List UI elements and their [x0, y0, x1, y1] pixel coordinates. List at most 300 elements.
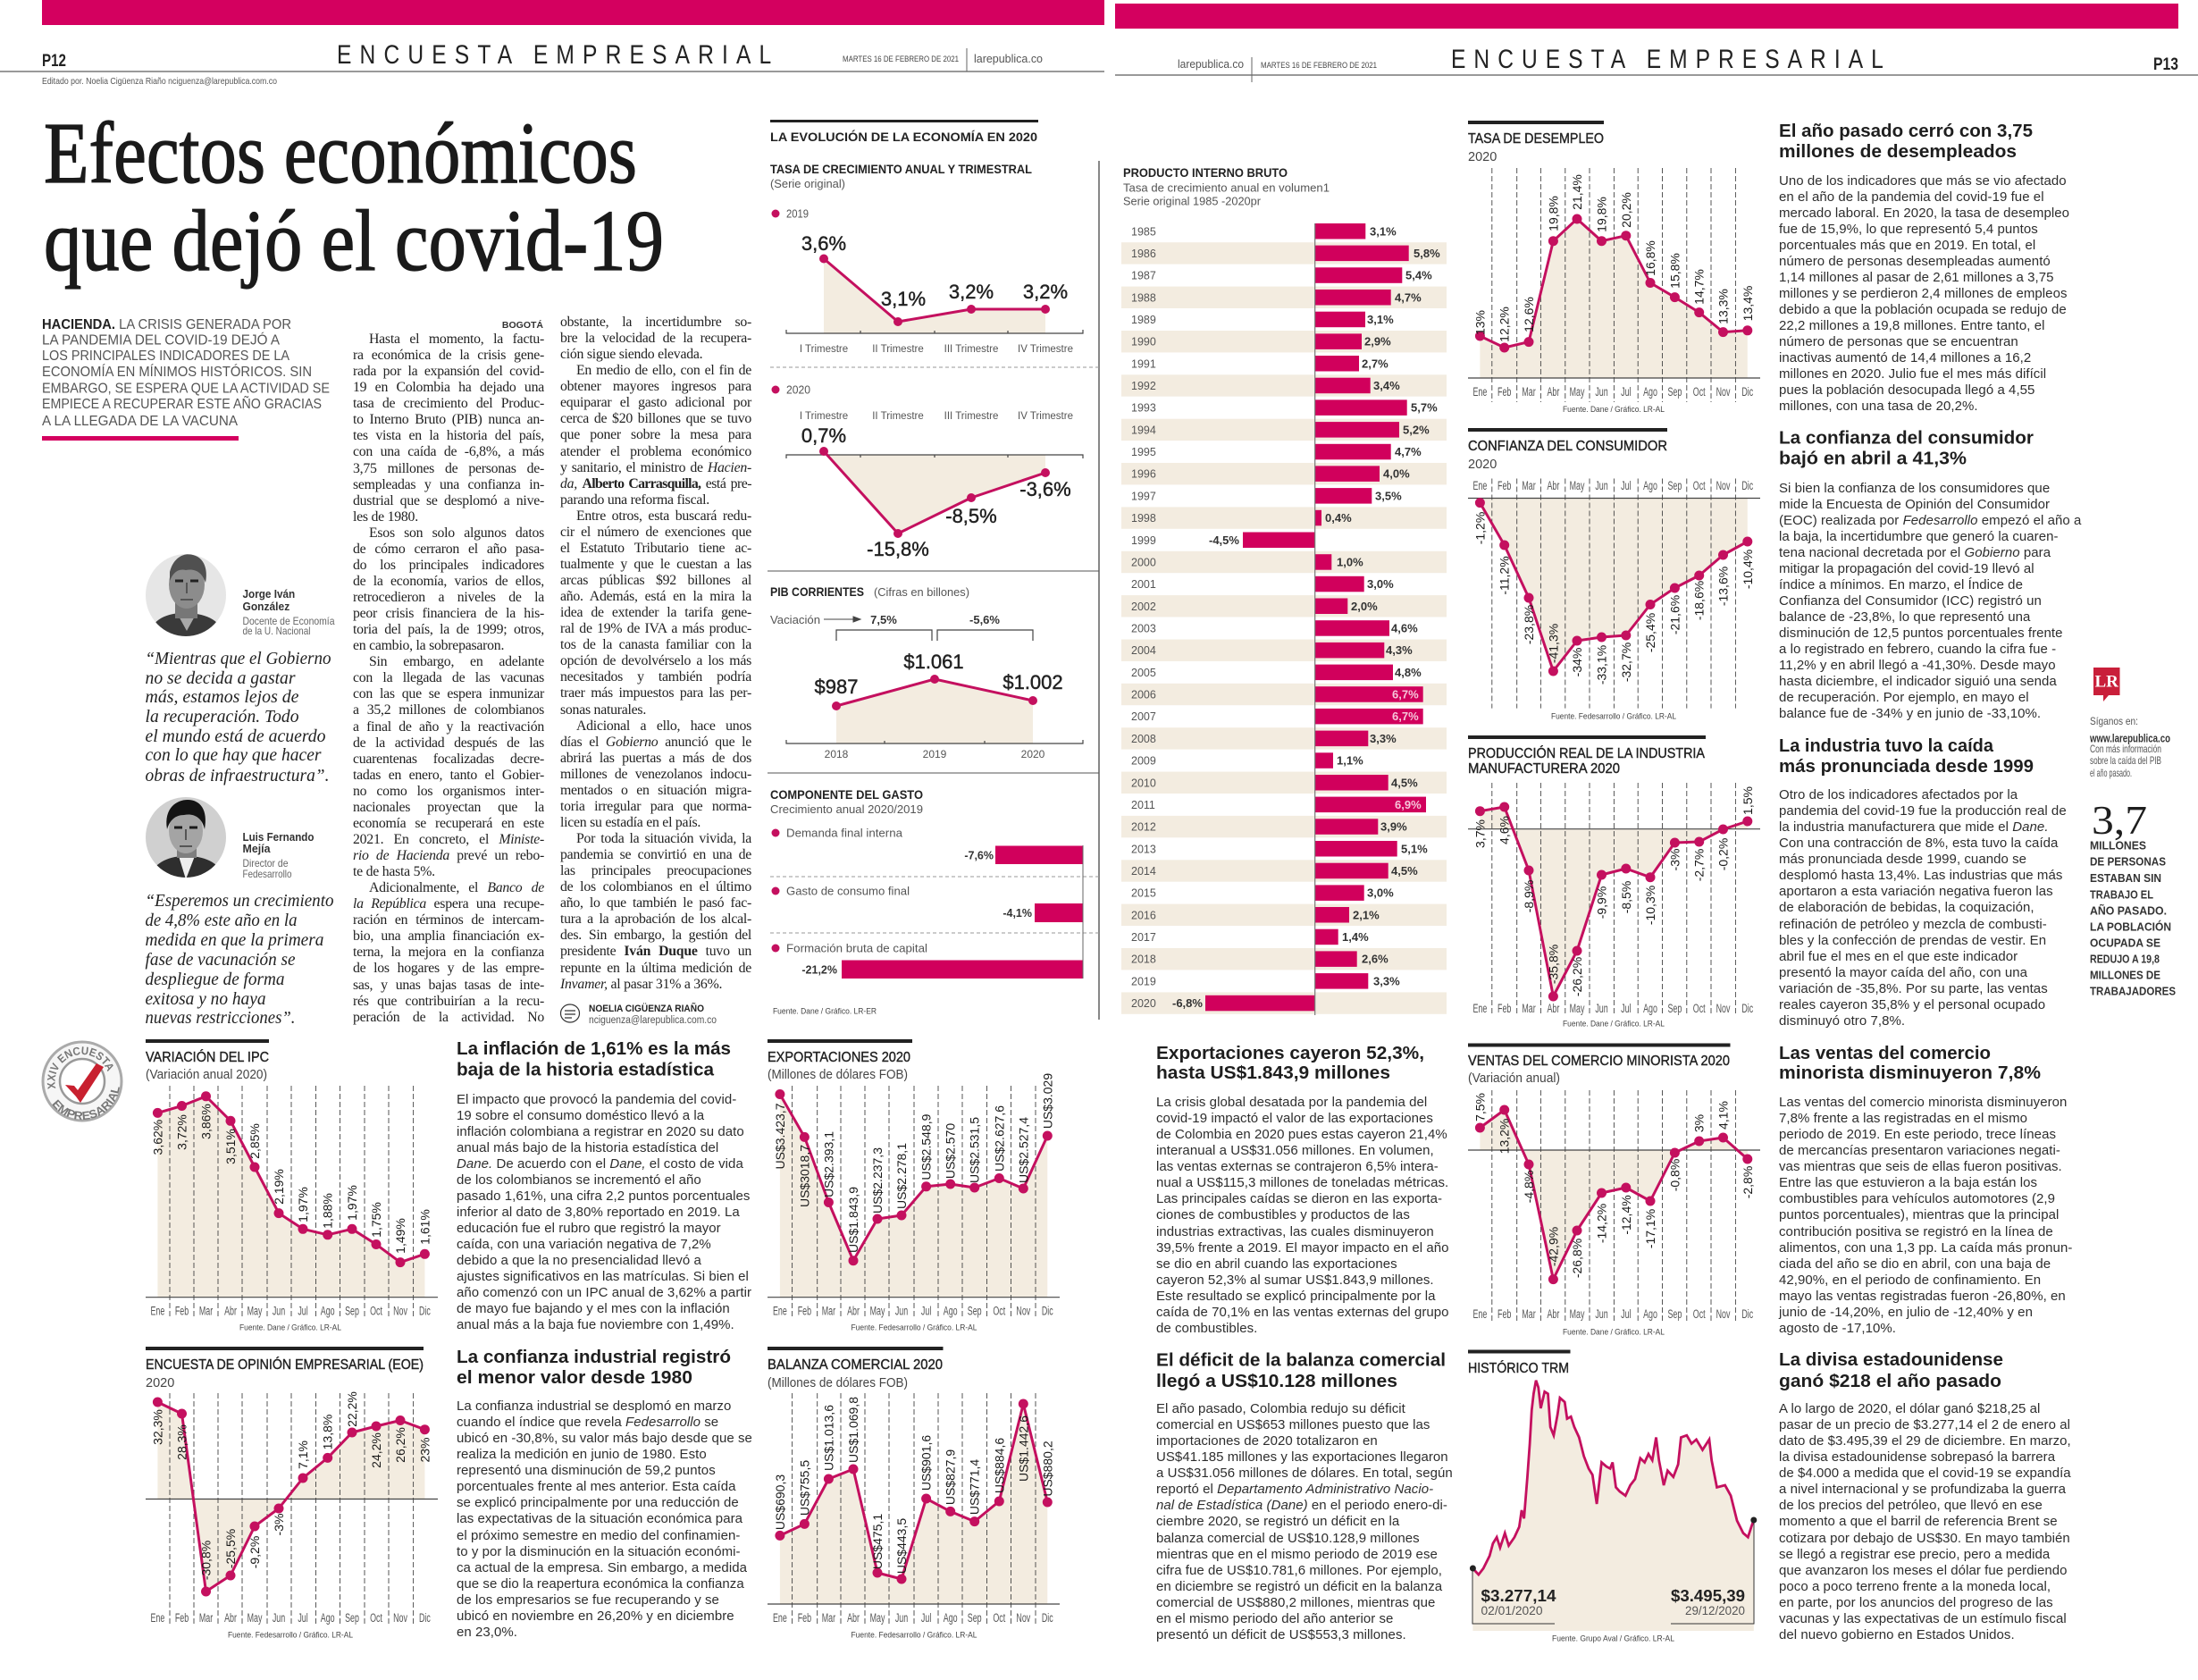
year labels: 1987 [1131, 270, 1156, 282]
month labels: Dic [1042, 1612, 1053, 1625]
article column 1: dustrial que se desplomó a nive- [353, 493, 544, 508]
text block: divisa: se llegó a registrar ese precio, pero a medida [1779, 1547, 2050, 1562]
month labels: Jun [273, 1306, 285, 1318]
article column 2: cerca de $20 billones que se tuvo [560, 411, 751, 426]
heading: exportaciones [768, 1039, 912, 1082]
headline: ventas minoristas: minorista disminuyeron 7,8% [1779, 1063, 2041, 1083]
month labels: Oct [1693, 386, 1706, 399]
text block: desempleados: porcentuales más que en 2019. En total, el [1779, 238, 2035, 253]
value labels: 3,62% [150, 1120, 164, 1155]
value labels: 2,85% [247, 1123, 262, 1159]
article column 1: rés que contribuirían a la recu- [353, 994, 544, 1009]
line series [780, 1094, 1047, 1261]
month labels: Dic [1741, 1308, 1753, 1322]
article column 1: to Interno Bruto (PIB) nunca an- [353, 412, 544, 427]
month labels: Nov [1716, 1308, 1731, 1322]
text block: divisa: la divisa estadounidense sobrepasó la barrera [1779, 1449, 2055, 1465]
month labels: Ene [150, 1612, 164, 1625]
article column 1: con una caída de -6,8%, a más [353, 444, 544, 459]
text block: confianza industrial: realiza la medición en junio de 1980. Esto [457, 1447, 707, 1462]
chart: componente del gasto: -4,1% [1003, 907, 1032, 920]
value labels: US$771,4 [968, 1459, 982, 1515]
heading: confianza [1468, 428, 1667, 472]
value labels: US$755,5 [797, 1460, 811, 1516]
header: page 13: larepublica.co [1178, 57, 1244, 71]
article column 1: de cómo cerraron el año pasa- [353, 542, 544, 557]
article column 2: ción sigue siendo elevada. [560, 347, 702, 362]
heading: confianza: 2020 [1468, 458, 1497, 472]
heading: balanza [768, 1347, 944, 1390]
article column 2: días el Gobierno anunció que le [560, 735, 751, 750]
text block: inflación: anual más a la baja fue noviembre con 1,49%. [457, 1317, 734, 1332]
article column 2: opción de devolvérselo a los más [560, 653, 751, 668]
text block: desempleados: millones y se perdieron 2,4 millones de empleos [1779, 286, 2068, 301]
text block: divisa [1779, 1401, 2071, 1642]
lead paragraph: HACIENDA. LA CRISIS GENERADA POR [42, 317, 291, 332]
text block: desempleados: millones, con una tasa de 20,2%. [1779, 399, 1978, 414]
byline: nciguenza@larepublica.com.co [589, 1015, 717, 1026]
month labels: Oct [370, 1612, 383, 1625]
value labels: -23,8% [1522, 605, 1536, 644]
year labels [1131, 225, 1156, 1010]
value labels: 4,0% [1383, 467, 1410, 481]
value labels: -8,9% [1522, 880, 1536, 912]
text block: ventas minoristas: combustibles para vehículos automotores (2,9 [1779, 1191, 2055, 1206]
article column 2: bre la velocidad de la recupera- [560, 331, 751, 346]
quote: Mejía: exitosa y no haya [145, 989, 266, 1009]
value labels: 12,2% [1497, 307, 1512, 342]
value labels: 1,4% [1342, 930, 1369, 944]
value labels: -25,5% [223, 1529, 238, 1568]
headline: industria: más pronunciada desde 1999 [1779, 757, 2034, 777]
year labels: 1988 [1131, 291, 1156, 304]
article column 2: las principales preocupaciones [560, 863, 751, 878]
quote: González: “Mientras que el Gobierno [145, 649, 331, 668]
month labels [150, 1612, 431, 1625]
article column 1: terna, la mejora en la confianza [353, 945, 544, 960]
heading: EOE: 2020 [146, 1376, 174, 1390]
article column 1: 2021. En concreto, el Ministe- [353, 832, 544, 847]
year labels: 1998 [1131, 512, 1156, 525]
heading: desempleo [1468, 121, 1604, 164]
value labels: 15,8% [1667, 253, 1682, 289]
text block: ventas minoristas: contribución positiva se registró en la línea de [1779, 1224, 2053, 1239]
article column 1: 19 en Colombia ha dejado una [353, 380, 544, 395]
month labels: Sep [345, 1306, 359, 1318]
value labels: 4,8% [1395, 666, 1422, 679]
value labels: 4,1% [1716, 1101, 1730, 1130]
text block: inflación: Dane. De acuerdo con el Dane, el costo de vida [457, 1156, 743, 1172]
chart: componente del gasto: -21,2% [801, 963, 837, 976]
month labels: Mar [199, 1306, 213, 1318]
chart: PIB corrientes: -5,6% [969, 613, 1000, 626]
header: page 12: Editado por. Noelia Cigüenza Riaño nciguenza@larepublica.com.co [42, 76, 277, 87]
value labels: US$2.531,5 [968, 1117, 982, 1183]
value labels: 5,4% [1405, 269, 1432, 282]
chart: PIB corrientes: 7,5% [870, 613, 897, 626]
year labels: 1989 [1131, 314, 1156, 326]
text block: divisa: vacunas y las expectativas de un estímulo fiscal [1779, 1611, 2067, 1626]
text block: consumidor: balance fue de -34% y en junio de -33,10%. [1779, 706, 2041, 721]
text block: confianza industrial: cuando el índice que revela Fedesarrollo se [457, 1415, 718, 1430]
value labels: 4,6% [1497, 816, 1512, 844]
quote: Mejía: de 4,8% este año en la [145, 911, 297, 930]
line series [157, 1402, 424, 1592]
year labels: 2017 [1131, 931, 1156, 944]
month labels: Ago [321, 1306, 335, 1318]
article column 1: tasa de crecimiento del Produc- [353, 396, 544, 411]
article column 2: ral de 19% de IVA a más produc- [560, 621, 751, 636]
article column 1: ración en términos de intercam- [353, 912, 544, 928]
value labels: 20,2% [1619, 192, 1633, 228]
value labels: -2,7% [1692, 849, 1707, 881]
text block: inflación: de los colombianos se incrementó el año [457, 1172, 701, 1188]
month labels: Feb [175, 1306, 189, 1318]
sidebar: big number: OCUPADA SE [2090, 937, 2160, 949]
text block: exportaciones: covid-19 impactó el valor de las exportaciones [1156, 1111, 1433, 1126]
text block: exportaciones: La crisis global desatada por la pandemia del [1156, 1095, 1427, 1110]
chart: crecimiento 2020: -3,6% [1019, 478, 1071, 500]
value labels: -26,2% [1570, 957, 1584, 996]
quote: González: la recuperación. Todo [145, 707, 298, 727]
heading: ventas [1468, 1044, 1730, 1086]
article column 1: 3,75 millones de personas de- [353, 461, 544, 475]
value labels: US$3018,7 [797, 1145, 811, 1207]
chart: exportaciones 2020 [768, 1039, 1060, 1333]
month labels: Mar [1522, 386, 1536, 399]
year labels: 2002 [1131, 601, 1156, 613]
text block: inflación: anual más bajo de la historia estadística del [457, 1140, 718, 1155]
month labels: Dic [1741, 1003, 1753, 1016]
article column 1: de la actividad después de las [353, 735, 544, 751]
seal: XXIV Encuesta Empresarial [41, 1040, 123, 1122]
chart: crecimiento 2020: 2020 [786, 382, 810, 397]
month labels: Abr [847, 1612, 860, 1625]
month labels: May [870, 1306, 885, 1318]
icon: LR logo [2093, 668, 2119, 701]
byline [561, 1003, 717, 1026]
article column 2: que poner sobre la mesa para [560, 427, 751, 442]
text block: consumidor: (EOC) realizada por Fedesarrollo empezó el año a [1779, 513, 2081, 528]
lead paragraph: A LA LLEGADA DE LA VACUNA [42, 414, 238, 429]
year labels: 2011 [1131, 799, 1155, 811]
month labels [150, 1306, 431, 1318]
chart: crecimiento 2020: -8,5% [945, 505, 997, 527]
heading: producción [1468, 735, 1706, 777]
value labels: 3,4% [1373, 379, 1400, 392]
chart: crecimiento 2019: 3,6% [801, 232, 846, 255]
value labels: 1,5% [1741, 786, 1755, 815]
month labels: Feb [798, 1612, 811, 1625]
sidebar: big number [2090, 797, 2176, 997]
year labels: 2005 [1131, 667, 1156, 679]
value labels: -4,8% [1522, 1171, 1536, 1203]
headline: divisa [1779, 1350, 2003, 1391]
text block: déficit: en diciembre se registró un déficit en la balanza [1156, 1579, 1442, 1594]
header: page 13: P13 [2153, 55, 2178, 74]
article column 1: de los hogares y de las empre- [353, 961, 544, 976]
value labels [1172, 224, 1440, 1010]
month labels: Feb [1497, 480, 1511, 493]
month labels: Jul [1621, 1308, 1631, 1322]
chart: PIB corrientes [768, 584, 1099, 773]
value labels [150, 1391, 432, 1580]
heading: producto interno bruto: Tasa de crecimiento anual en volumen1 [1123, 181, 1330, 195]
text block: inflación: debido a que la no presencialidad llevó a [457, 1253, 701, 1268]
text block: industria: más pronunciada desde 1999, cuando se [1779, 852, 2026, 867]
value labels: 16,8% [1643, 240, 1657, 276]
heading: desempleo: TASA DE DESEMPLEO [1468, 131, 1604, 147]
chart: crecimiento 2019: 3,2% [949, 281, 994, 303]
text block: divisa: de los precios del petróleo, que llevó en ese [1779, 1498, 2043, 1513]
article column 1: no como los organismos inter- [353, 784, 544, 799]
year labels: 1993 [1131, 402, 1156, 415]
value labels: -41,3% [1546, 624, 1560, 663]
article column 2: pandemia se convirtió en una de [560, 847, 751, 862]
value labels [150, 1104, 432, 1254]
text block: industria: desplomó hasta 13,4%. Las industrias que más [1779, 868, 2062, 883]
heading: producto interno bruto [1123, 165, 1330, 207]
month labels: Ago [1643, 386, 1657, 399]
article column 1: con la llegada de las vacunas [353, 670, 544, 685]
month labels: Ene [1472, 480, 1487, 493]
value labels: 1,0% [1337, 556, 1363, 568]
article column 1: rada por la expansión del covid- [353, 364, 544, 379]
value labels: US$3.423,7 [773, 1103, 787, 1169]
name: Luis Fernando Mejía: Director de [243, 857, 289, 869]
headline: inflación [457, 1039, 731, 1079]
article column 1: te de hasta 5%. [353, 864, 435, 879]
article column 1: toria del país, la de 1999; otros, [353, 622, 544, 637]
text block: industria: presentó la mayor caída del año, con una [1779, 965, 2027, 980]
headline: consumidor: bajó en abril a 41,3% [1779, 449, 1967, 469]
article column 2: Invamer, al pasar 31% a 36%. [560, 977, 722, 992]
month labels: Jun [1595, 480, 1608, 493]
month labels: Ene [1472, 1003, 1487, 1016]
headline: confianza industrial: el menor valor desde 1980 [457, 1368, 692, 1388]
value labels: 26,2% [393, 1427, 407, 1463]
value labels: 13,4% [1741, 286, 1755, 321]
value labels: -34% [1570, 648, 1584, 676]
heading: EOE: ENCUESTA DE OPINIÓN EMPRESARIAL (EOE) [146, 1356, 424, 1373]
article column 2: arcas públicas $92 billones al [560, 573, 751, 588]
year labels: 1986 [1131, 248, 1156, 260]
month labels: Ene [773, 1306, 787, 1318]
text block: desempleados: 22,2 millones a 19,8 millones. Entre tanto, el [1779, 318, 2044, 333]
value labels: -33,1% [1594, 645, 1608, 685]
month labels: Oct [1693, 1003, 1706, 1016]
text block: desempleados: número de personas que se encuentran [1779, 334, 2018, 349]
year labels: 2010 [1131, 777, 1156, 789]
header: page 12: P12 [42, 52, 66, 71]
headline: divisa: ganó $218 el año pasado [1779, 1372, 2001, 1391]
chart: exportaciones 2020: Fuente. Fedesarrollo / Gráfico. LR-AL [851, 1323, 977, 1333]
article column 1: les de 1980. [353, 509, 418, 525]
month labels [773, 1306, 1053, 1318]
heading: evolución: LA EVOLUCIÓN DE LA ECONOMÍA EN 2020 [770, 129, 1037, 144]
article column 2: atender el problema económico [560, 443, 751, 459]
text block: consumidor: hasta diciembre, el indicador siguió una senda [1779, 674, 2057, 689]
text block: exportaciones: 39,5% frente a 2019. El mayor impacto en el año [1156, 1240, 1449, 1256]
value labels: 1,97% [345, 1185, 359, 1221]
article column 1: ra económica de la crisis gene- [353, 348, 544, 363]
value labels: 5,1% [1401, 842, 1428, 855]
year labels: 2013 [1131, 843, 1156, 855]
year labels: 2016 [1131, 909, 1156, 921]
quote: González: el mundo está de acuerdo [145, 727, 325, 746]
text block: industria: reales cayeron 35,8% y el personal ocupado [1779, 997, 2045, 1012]
subheading: tasa de crecimiento: TASA DE CRECIMIENTO ANUAL Y TRIMESTRAL [770, 163, 1032, 176]
quote: González: más, estamos lejos de [145, 687, 299, 707]
text block: exportaciones: nual a US$115,3 millones de toneladas métricas. [1156, 1175, 1448, 1190]
chart: componente del gasto: Fuente. Dane / Gráfico. LR-ER [773, 1006, 877, 1017]
chart: componente del gasto: Gasto de consumo final [786, 885, 910, 897]
year labels: 2019 [1131, 975, 1156, 987]
month labels [1472, 1003, 1753, 1016]
chart: tasa de desempleo: Fuente. Dane / Gráfico. LR-AL [1563, 405, 1665, 415]
year labels: 2015 [1131, 887, 1156, 900]
value labels: 1,49% [393, 1218, 407, 1254]
portrait: Luis Fernando Mejía [146, 797, 226, 878]
month labels: Oct [993, 1612, 1006, 1625]
text block: industria: disminuyó otro 7,8%. [1779, 1013, 1905, 1029]
heading: exportaciones: (Millones de dólares FOB) [768, 1068, 908, 1082]
value labels: -30,8% [198, 1541, 213, 1580]
sidebar: síganos: sobre la caída del PIB [2090, 754, 2161, 767]
year labels: 2012 [1131, 821, 1156, 834]
heading: ventas: (Variación anual) [1468, 1071, 1560, 1086]
text block: déficit: ciembre 2020, se registró un déficit en la [1156, 1514, 1399, 1529]
article column 1: sempleadas y una confianza in- [353, 477, 544, 492]
text block: déficit: El año pasado, Colombia redujo su déficit [1156, 1401, 1405, 1416]
row stripes [1121, 242, 1447, 1014]
headline: confianza industrial [457, 1348, 731, 1388]
text block: confianza industrial: ubicó en noviembre en 26,20% y en diciembre [457, 1609, 734, 1624]
lead paragraph: ECONOMÍA EN MÍNIMOS HISTÓRICOS. SIN [42, 363, 312, 380]
chart: variación del IPC [146, 1039, 438, 1333]
month labels: Mar [822, 1612, 835, 1625]
value labels: 3,0% [1367, 886, 1394, 900]
value labels: 4,5% [1391, 776, 1418, 789]
text block: desempleados: 1,14 millones al pasar de 2,61 millones a 3,75 [1779, 270, 2053, 285]
value labels: -0,8% [1667, 1159, 1682, 1191]
article column 1: de la economía, varios de ellos, [353, 574, 544, 589]
chart: crecimiento 2019: IV Trimestre [1018, 344, 1073, 355]
text block: consumidor: índice a mínimos. En marzo, el Índice de [1779, 577, 2023, 592]
heading: balanza: BALANZA COMERCIAL 2020 [768, 1357, 943, 1373]
chart: PIB corrientes: $1.002 [1003, 671, 1063, 693]
text block: déficit: cifra fue de US$10.781,6 millones. Por ejemplo, [1156, 1563, 1442, 1578]
sidebar: big number: AÑO PASADO. [2090, 904, 2167, 917]
value labels: 22,2% [345, 1391, 359, 1427]
value labels: 1,75% [369, 1202, 383, 1238]
text block: consumidor: Confianza del Consumidor (ICC) registró un [1779, 593, 2042, 609]
heading: variación del IPC [146, 1039, 269, 1082]
article column 1: con las que se espera inmunizar [353, 686, 544, 701]
text block: inflación: pasado 1,61%, una cifra 2,2 puntos porcentuales [457, 1189, 750, 1204]
sidebar: big number: REDUJO A 19,8 [2090, 953, 2160, 965]
text block: ventas minoristas: vas mientras que seis de ellas fueron positivas. [1779, 1159, 2062, 1174]
month labels: Abr [224, 1306, 237, 1318]
header: page 12: ENCUESTA EMPRESARIAL [337, 39, 771, 70]
text block: consumidor: tena nacional decretada por el Gobierno para [1779, 545, 2051, 560]
chart: variación del IPC: Fuente. Dane / Gráfico. LR-AL [239, 1323, 341, 1333]
month labels: Jun [1595, 1003, 1608, 1016]
last value: $3.495,39 [1671, 1587, 1745, 1605]
value labels: -11,2% [1497, 556, 1512, 595]
heading: variación del IPC: (Variación anual 2020) [146, 1068, 267, 1082]
month labels [1472, 480, 1753, 493]
article column 1: tes vista en la historia del país, [353, 428, 544, 443]
month labels: Dic [1042, 1306, 1053, 1318]
text block: inflación: caída, con una variación negativa de 7,2% [457, 1237, 711, 1252]
text block: inflación: 19 sobre el consumo doméstico llevó a la [457, 1108, 704, 1123]
text block: desempleados: en el año de la pandemia del covid-19 fue el [1779, 189, 2044, 205]
byline: NOELIA CIGÜENZA RIAÑO [589, 1003, 704, 1014]
chart: PIB corrientes: $1.061 [903, 651, 964, 673]
article column 2: da, Alberto Carrasquilla, está pre- [560, 476, 751, 491]
heading: variación del IPC: VARIACIÓN DEL IPC [146, 1048, 269, 1065]
value labels: -17,1% [1643, 1209, 1657, 1248]
text block: confianza industrial: en 23,0%. [457, 1625, 517, 1640]
title: Efectos económicos [44, 105, 637, 201]
text block: divisa: en parte, por los anuncios del progreso de las [1779, 1595, 2053, 1610]
month labels: Nov [1016, 1612, 1030, 1625]
value labels: US$2.393,1 [821, 1131, 835, 1197]
heading: producto interno bruto: Serie original 1985 -2020pr [1123, 195, 1262, 207]
value labels: -42,9% [1546, 1227, 1560, 1266]
year labels: 2000 [1131, 556, 1156, 568]
text block: exportaciones: de Colombia en 2020 pues estas cayeron 21,4% [1156, 1127, 1447, 1142]
value labels: 2,6% [1362, 953, 1388, 966]
text block: déficit: comercial en US$653 millones puesto que las [1156, 1417, 1430, 1432]
value labels: 5,2% [1403, 423, 1430, 436]
value labels: -8,5% [1619, 881, 1633, 913]
value labels: 2,19% [272, 1169, 286, 1205]
heading: producto interno bruto: PRODUCTO INTERNO BRUTO [1123, 165, 1288, 180]
header: page 13: ENCUESTA EMPRESARIAL [1451, 44, 1883, 74]
value labels: US$884,6 [992, 1438, 1006, 1493]
sidebar: síganos: Con más información [2090, 743, 2161, 755]
article column 1: economía se recuperará en este [353, 816, 544, 831]
quote: Mejía: nuevas restricciones”. [145, 1008, 295, 1028]
chart: componente del gasto: Formación bruta de capital [786, 942, 927, 954]
text block: desempleados: millones en 2020. Julio fue el mes más difícil [1779, 366, 2046, 382]
heading: producción: PRODUCCIÓN REAL DE LA INDUSTRIA [1468, 744, 1705, 761]
article column 2: de los colombianos en el último [560, 879, 751, 895]
heading: balanza: (Millones de dólares FOB) [768, 1376, 908, 1390]
article column 2: el Estatuto Tributario tiene ac- [560, 541, 751, 556]
chart: crecimiento 2019: I Trimestre [800, 344, 848, 355]
value labels: -12,4% [1619, 1195, 1633, 1235]
month labels: May [1570, 386, 1585, 399]
value labels: 32,3% [150, 1409, 164, 1445]
text block: inflación [457, 1092, 751, 1332]
text block: consumidor: mide la Encuesta de Opinión del Consumidor [1779, 497, 2050, 512]
text block: confianza industrial: La confianza industrial se desplomó en marzo [457, 1399, 731, 1414]
quote: González: obras de infraestructura”. [145, 766, 329, 785]
value labels: 1,1% [1337, 754, 1363, 768]
chart: PIB corrientes: PIB CORRIENTES [770, 584, 864, 599]
text block: inflación: El impacto que provocó la pandemia del covid- [457, 1092, 736, 1106]
header: page 12: larepublica.co [974, 52, 1043, 65]
month labels: Ago [1643, 1003, 1657, 1016]
article column 2: tualmente y que le cuestan a las [560, 557, 751, 572]
year labels: 2006 [1131, 688, 1156, 701]
chart: componente del gasto: -7,6% [964, 849, 994, 861]
text block: industria: aportaron a esta variación negativa fueron las [1779, 884, 2053, 899]
text block: consumidor: balance de -23,8%, lo que representó una [1779, 609, 2030, 625]
